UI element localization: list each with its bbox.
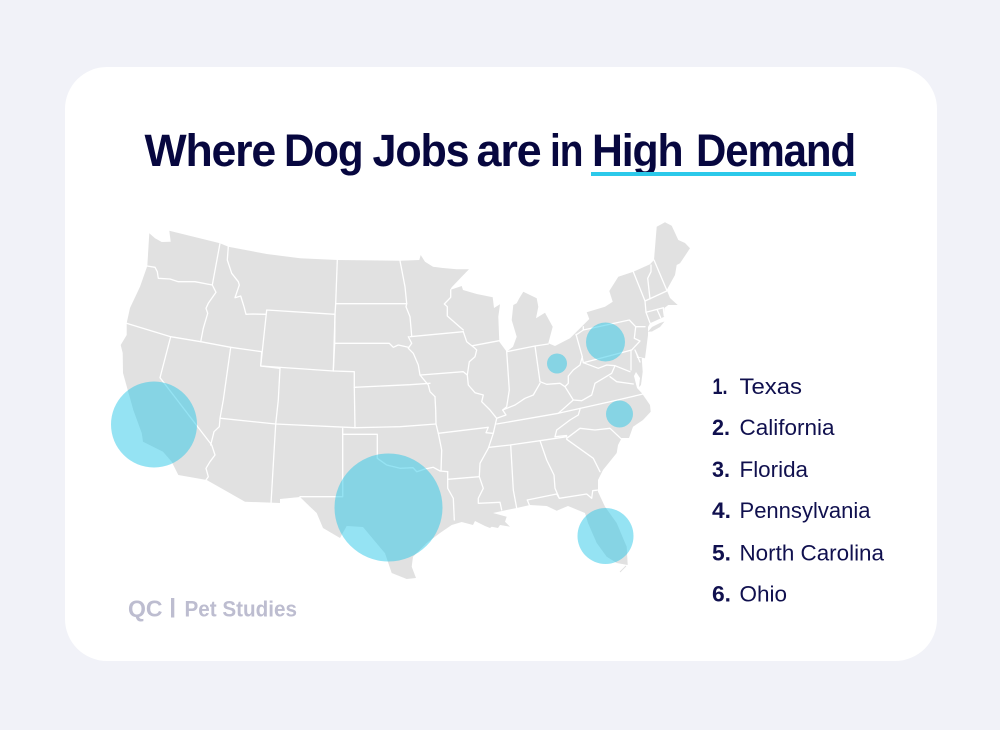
item 1: 1. bbox=[712, 374, 728, 399]
item 4: 4. bbox=[712, 498, 731, 523]
panel: white card bbox=[65, 67, 937, 661]
title underline bbox=[591, 172, 856, 176]
brand logo bbox=[128, 596, 297, 622]
bubble: North Carolina bbox=[606, 400, 633, 428]
brand logo: Pet Studies bbox=[184, 597, 297, 622]
title: Demand bbox=[696, 125, 855, 176]
state borders bbox=[127, 243, 667, 520]
item 5: North Carolina bbox=[740, 540, 884, 566]
map land mass bbox=[121, 222, 690, 579]
title: High bbox=[592, 125, 682, 176]
bubble: Texas bbox=[334, 454, 442, 562]
bubble: California bbox=[111, 382, 197, 468]
item 2: 2. bbox=[712, 415, 730, 440]
Florida Keys bbox=[620, 566, 626, 572]
title: Jobs bbox=[372, 125, 468, 176]
bubble: Ohio bbox=[547, 354, 567, 374]
item 1 bbox=[712, 374, 802, 399]
item 3: Florida bbox=[740, 457, 808, 482]
item 6 bbox=[712, 582, 787, 606]
item 6: 6. bbox=[712, 582, 731, 606]
bubble: Pennsylvania bbox=[586, 322, 625, 362]
title: in bbox=[550, 125, 582, 176]
item 3: 3. bbox=[712, 457, 730, 482]
item 5: 5. bbox=[712, 540, 731, 566]
US map bbox=[121, 222, 690, 579]
item 2: California bbox=[740, 415, 835, 440]
bubble: Florida bbox=[578, 508, 634, 564]
title: are bbox=[476, 125, 540, 176]
item 6: Ohio bbox=[740, 582, 787, 606]
item 1: Texas bbox=[740, 374, 802, 399]
title: Dog bbox=[284, 125, 362, 176]
title: Where bbox=[144, 125, 275, 176]
item 4: Pennsylvania bbox=[740, 498, 871, 523]
title bbox=[144, 125, 856, 176]
brand logo: QC bbox=[128, 596, 162, 622]
ranked state list bbox=[712, 374, 884, 606]
Long Island bbox=[648, 322, 664, 332]
